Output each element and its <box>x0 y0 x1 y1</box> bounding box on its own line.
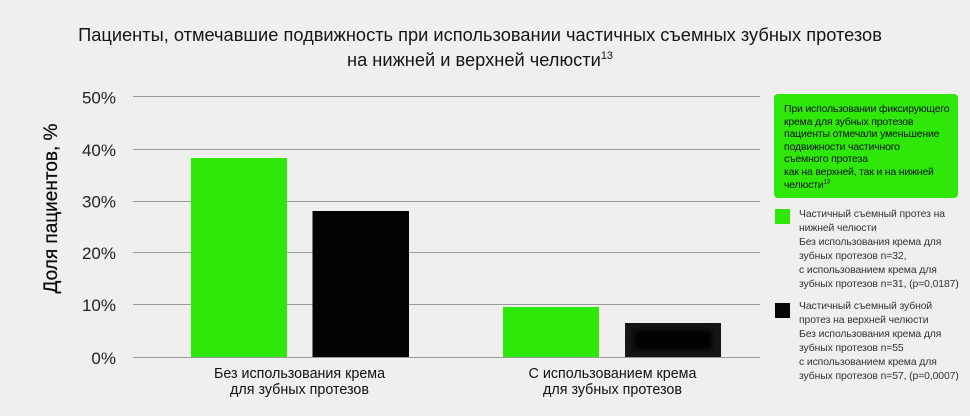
callout <box>774 94 958 198</box>
legend text: lower jaw: нижней челюсти <box>799 223 877 234</box>
category label: with cream: для зубных протезов <box>543 382 682 398</box>
legend text: lower jaw: зубных протезов n=31, (p=0,0187) <box>799 279 959 290</box>
bar: with cream, lower jaw <box>503 307 599 357</box>
y axis labels: 50% <box>82 88 116 108</box>
callout: крема для зубных протезов <box>784 116 913 128</box>
legend text: lower jaw: зубных протезов n=32, <box>799 251 906 262</box>
y axis labels: 0% <box>91 349 116 368</box>
legend text: lower jaw <box>799 209 959 290</box>
legend text: upper jaw: с использованием крема для <box>799 357 937 368</box>
legend text: upper jaw: Без использования крема для <box>799 329 941 340</box>
legend text: upper jaw: Частичный съемный зубной <box>799 301 932 312</box>
legend text: lower jaw: Частичный съемный протез на <box>799 209 945 220</box>
y axis title: Доля пациентов, % <box>41 123 62 293</box>
y axis labels: 10% <box>82 296 116 315</box>
y axis labels: 20% <box>82 244 116 263</box>
bar: without cream, upper jaw <box>312 211 409 357</box>
y axis labels: 40% <box>82 141 116 160</box>
legend text: upper jaw: протез на верхней челюсти <box>799 315 928 326</box>
title: Пациенты, отмечавшие подвижность при использовании частичных съемных зубных протезов <box>78 24 882 45</box>
legend: upper jaw <box>775 301 959 382</box>
callout: челюсти13 <box>784 178 830 191</box>
category label: with cream: С использованием крема <box>529 366 697 382</box>
category label: without cream: для зубных протезов <box>230 382 369 398</box>
bar chart <box>41 88 760 398</box>
callout: как на верхней, так и на нижней <box>784 166 934 178</box>
legend: lower jaw <box>775 209 959 290</box>
category label: without cream: Без использования крема <box>214 366 385 382</box>
y axis labels <box>82 88 116 368</box>
legend text: lower jaw: с использованием крема для <box>799 265 937 276</box>
legend text: upper jaw: зубных протезов n=57, (p=0,0007) <box>799 371 959 382</box>
callout: съемного протеза <box>784 153 868 165</box>
legend text: upper jaw: зубных протезов n=55 <box>799 343 904 354</box>
bar: with cream, upper jaw <box>625 323 721 357</box>
legend text: lower jaw: Без использования крема для <box>799 237 941 248</box>
title <box>78 24 882 70</box>
callout: подвижности частичного <box>784 141 900 153</box>
bar: without cream, lower jaw <box>191 158 287 357</box>
icon: green swatch <box>775 209 790 224</box>
title: на нижней и верхней челюсти13 <box>347 49 613 70</box>
legend text: upper jaw <box>799 301 959 382</box>
callout: пациенты отмечали уменьшение <box>784 128 939 140</box>
callout: При использовании фиксирующего <box>784 103 949 115</box>
y axis labels: 30% <box>82 192 116 212</box>
icon: black swatch <box>775 303 790 318</box>
